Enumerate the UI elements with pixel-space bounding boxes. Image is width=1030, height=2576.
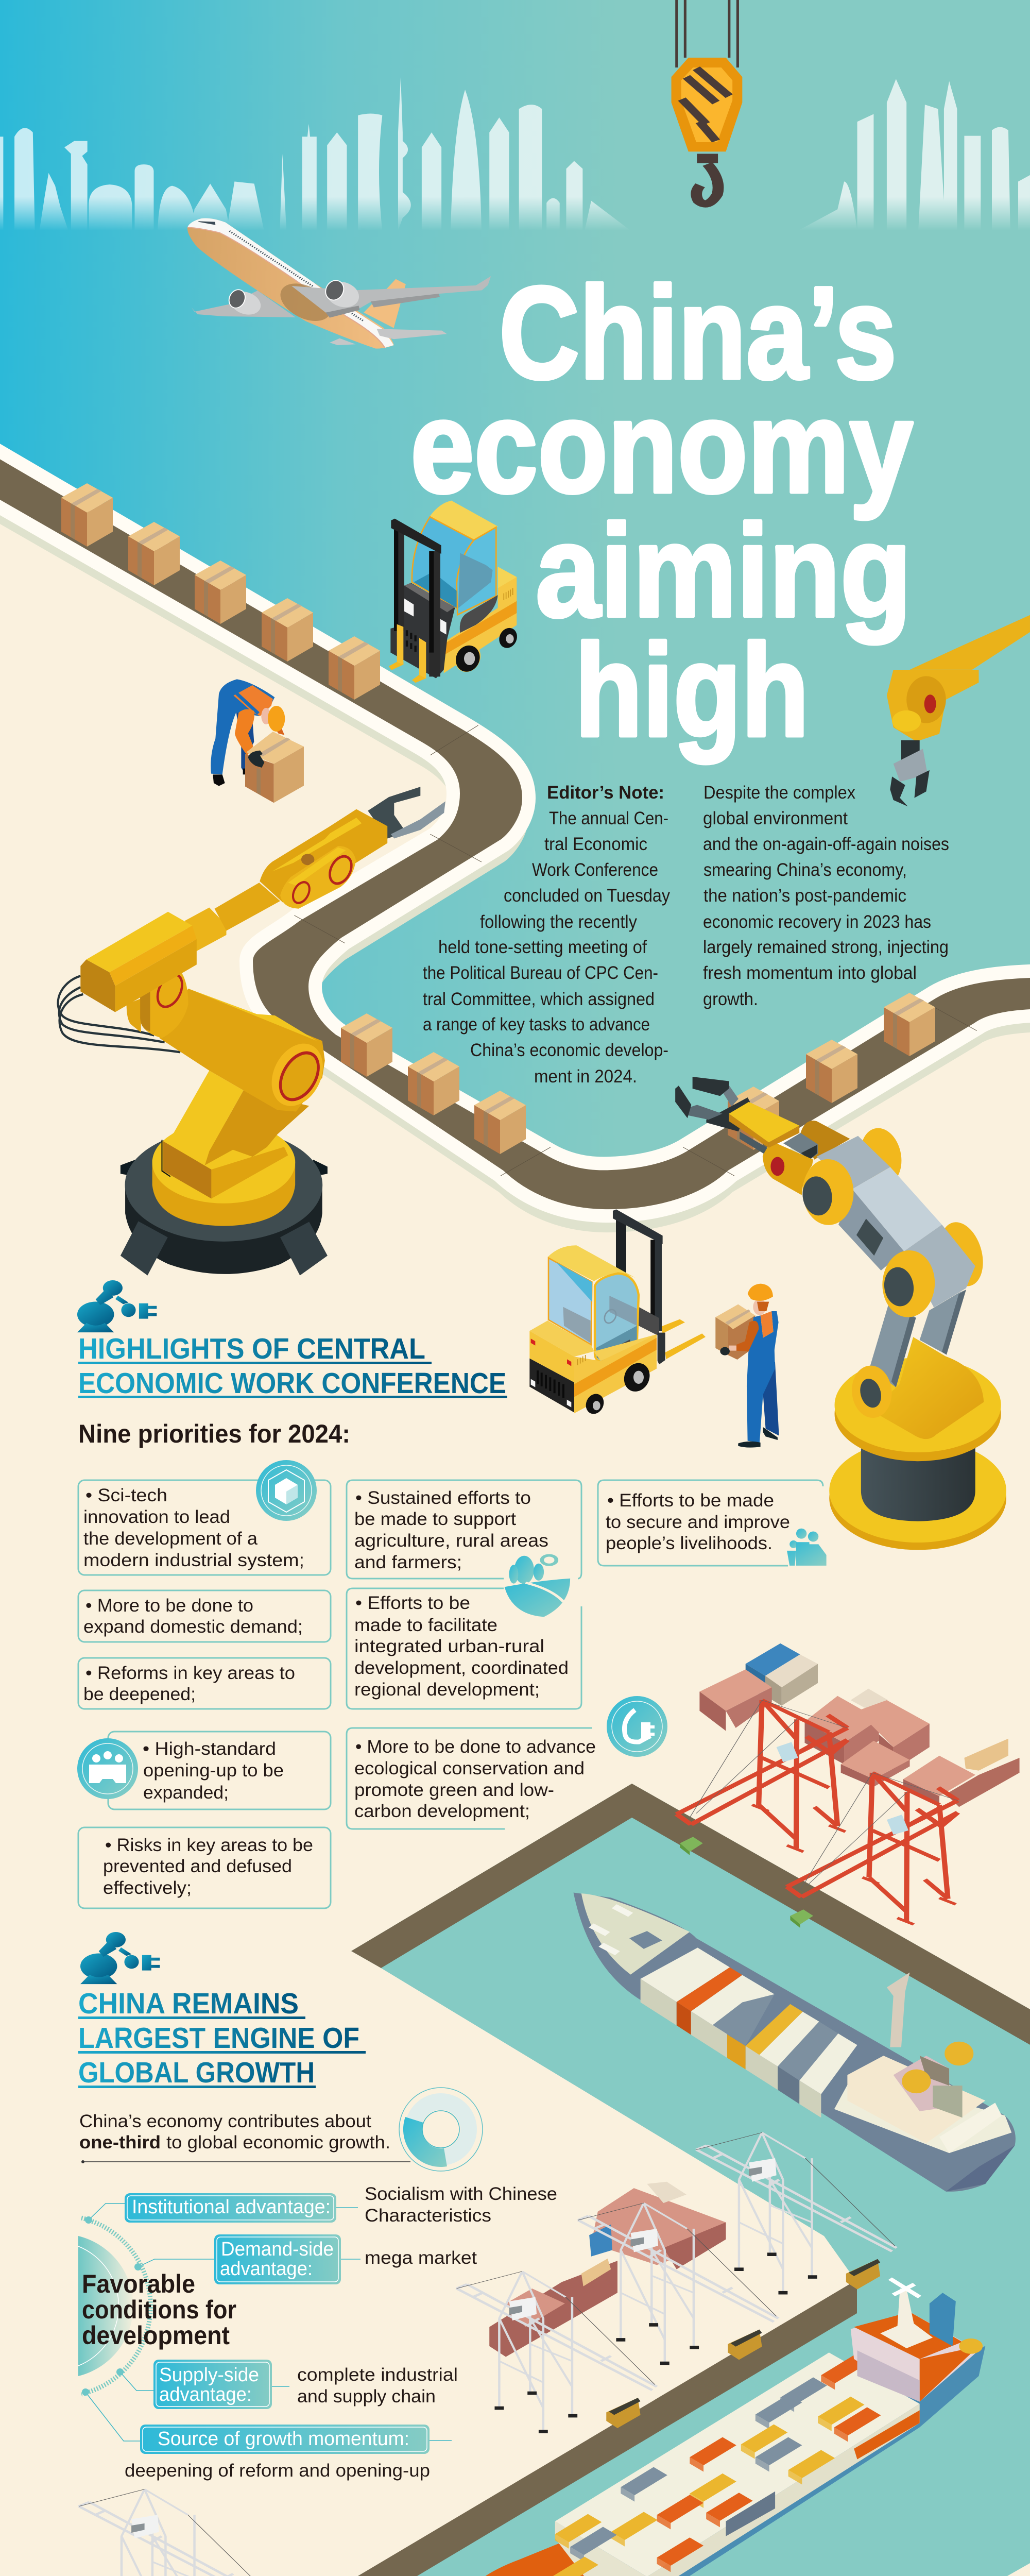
title [410, 260, 913, 764]
text: priorities: to secure and improve [606, 1512, 790, 1532]
editor's note right column: global environment [703, 808, 848, 828]
box: livelihoods [598, 1480, 823, 1566]
text: socialism: Socialism with Chinese [365, 2184, 557, 2204]
text: mega market: mega market [365, 2248, 477, 2268]
tag: supply-side advantage: advantage: [159, 2384, 252, 2405]
text: one third contribution: one-third [79, 2132, 161, 2153]
heading: china remains largest engine [78, 1987, 366, 2089]
heading: china remains largest engine: GLOBAL GROWTH [78, 2056, 315, 2089]
icon: section 1 robot [77, 1280, 157, 1332]
editor's note left column: held tone-setting meeting of [438, 937, 647, 957]
editor's note left column [423, 783, 670, 1087]
diagram: favorable conditions arc [78, 2204, 452, 2441]
icon: innovation cube [256, 1460, 317, 1521]
text: priorities: development, coordinated [354, 1658, 569, 1678]
box: reforms [78, 1658, 331, 1709]
tag: demand-side advantage [214, 2234, 341, 2284]
ship two [460, 2279, 985, 2576]
box: sci-tech [78, 1480, 331, 1575]
text: priorities: • Sustained efforts to [355, 1488, 531, 1508]
tag: demand-side advantage: advantage: [220, 2258, 313, 2280]
editor's note right column: and the on-again-off-again noises [703, 834, 949, 854]
editor's note right column: fresh momentum into global [703, 963, 917, 983]
crane hook [672, 0, 742, 204]
text: priorities: • Efforts to be made [607, 1490, 774, 1511]
heading: china remains largest engine: CHINA REMAINS [78, 1987, 299, 2020]
text: complete industrial: and supply chain [297, 2386, 436, 2406]
editor's note right column: the nation’s post-pandemic [703, 886, 906, 906]
editor's note right column: growth. [703, 989, 758, 1009]
icon: people [787, 1529, 827, 1566]
red cranes [677, 1700, 958, 1928]
box: domestic demand [78, 1590, 331, 1642]
editor's note left column: the Political Bureau of CPC Cen- [423, 963, 658, 983]
tag: demand-side advantage: Demand-side [221, 2239, 334, 2260]
text: priorities: the development of a [83, 1529, 258, 1549]
panel: nine priorities boxes [78, 1480, 823, 1908]
text: priorities [83, 1485, 790, 1898]
heading: favorable conditions: conditions for [82, 2295, 236, 2324]
icon: rural plant and leaf [505, 1555, 570, 1617]
text: priorities: ecological conservation and [354, 1758, 585, 1778]
text: complete industrial [297, 2365, 458, 2406]
text: priorities: expand domestic demand; [83, 1617, 303, 1637]
editor's note right column [703, 783, 949, 1009]
city skyline [0, 77, 1030, 231]
text: priorities: • Efforts to be [355, 1593, 470, 1613]
text: priorities: • Reforms in key areas to [85, 1663, 295, 1683]
text: priorities: be deepened; [83, 1684, 196, 1704]
editor's note left column: concluded on Tuesday [504, 886, 670, 906]
heading: highlights of central economic work conference [78, 1332, 507, 1400]
box: ecological [347, 1728, 592, 1829]
text: priorities: prevented and defused [103, 1856, 292, 1876]
text: priorities: promote green and low- [354, 1780, 554, 1800]
icon: opening-up people [77, 1738, 138, 1799]
editor's note right column: Despite the complex [703, 783, 855, 803]
worker carrying box [211, 679, 304, 803]
forklift bottom [529, 1209, 706, 1417]
tag: source of growth momentum [140, 2425, 430, 2454]
heading: china remains largest engine: LARGEST ENGINE OF [78, 2022, 359, 2055]
text: priorities: modern industrial system; [83, 1550, 304, 1570]
editor's note right column: economic recovery in 2023 has [703, 912, 931, 932]
text: priorities: regional development; [354, 1680, 540, 1700]
heading: highlights of central economic work conference: HIGHLIGHTS OF CENTRAL [78, 1332, 425, 1365]
text: complete industrial: complete industrial [297, 2365, 458, 2385]
icon: section 2 robot [80, 1932, 160, 1984]
tag: supply-side advantage [153, 2360, 272, 2409]
box: opening-up [108, 1732, 331, 1809]
text: priorities: be made to support [354, 1509, 516, 1529]
editor's note left column: ment in 2024. [534, 1066, 637, 1087]
heading: favorable conditions: development [82, 2321, 230, 2350]
title: aiming [536, 498, 912, 645]
box: agriculture [347, 1480, 581, 1579]
text: priorities: and farmers; [354, 1552, 462, 1572]
text: priorities: • More to be done to [85, 1596, 253, 1616]
text: priorities: agriculture, rural areas [354, 1531, 548, 1551]
text: priorities: people’s livelihoods. [606, 1533, 772, 1553]
text: priorities: opening-up to be [143, 1760, 284, 1781]
text: deepening of reform: deepening of reform and opening-up [125, 2461, 430, 2481]
editor's note left column: China’s economic develop- [470, 1040, 668, 1060]
large yellow robot arm [58, 787, 445, 1276]
editor's note right column: largely remained strong, injecting [703, 937, 949, 957]
heading: nine priorities: Nine priorities for 2024: [78, 1419, 350, 1448]
editor's note left column: The annual Cen- [549, 808, 668, 828]
forklift top [389, 501, 520, 683]
right grey robot arm [675, 1077, 1006, 1550]
icon: green plug [607, 1696, 667, 1757]
text: socialism [365, 2184, 557, 2226]
boxes on conveyor [61, 483, 935, 1154]
tag: source of growth momentum: Source of growth momentum: [158, 2428, 409, 2450]
text: priorities: integrated urban-rural [354, 1636, 544, 1656]
text: priorities: expanded; [143, 1783, 229, 1803]
text: priorities: • Sci-tech [85, 1485, 167, 1505]
text: socialism: Characteristics [365, 2206, 491, 2226]
box: risks [78, 1827, 331, 1908]
editor's note left column: tral Economic [544, 834, 647, 854]
editor's note left column: following the recently [480, 912, 637, 932]
text: one third contribution: China’s economy contributes about [79, 2111, 371, 2131]
port containers [699, 1643, 1020, 1807]
editor's note left column: Work Conference [532, 860, 658, 880]
title: economy [410, 374, 913, 520]
tag: institutional advantage: Institutional advantage: [132, 2196, 331, 2218]
text: priorities: made to facilitate [354, 1615, 497, 1635]
text: priorities: carbon development; [354, 1801, 530, 1821]
heading: highlights of central economic work conference: ECONOMIC WORK CONFERENCE [78, 1367, 506, 1400]
editor's note left column: Editor’s Note: [547, 783, 664, 803]
white cranes and red containers [0, 2132, 897, 2576]
top right robot arm [887, 615, 1030, 806]
heading: favorable conditions [82, 2269, 236, 2350]
text: priorities: • Risks in key areas to be [105, 1835, 313, 1855]
box: integrated development [347, 1588, 581, 1709]
title: China’s [499, 260, 897, 406]
tag: supply-side advantage: Supply-side [159, 2364, 259, 2386]
text: one third contribution: to global economic growth. [166, 2132, 390, 2153]
text: priorities: innovation to lead [83, 1507, 230, 1527]
editor's note left column: a range of key tasks to advance [423, 1014, 650, 1035]
conveyor belt [0, 439, 1030, 1232]
ship one [574, 1892, 1016, 2192]
text: priorities: effectively; [103, 1878, 192, 1898]
worker with box [715, 1284, 779, 1448]
plane [187, 218, 491, 349]
editor's note left column: tral Committee, which assigned [423, 989, 655, 1009]
heading: favorable conditions: Favorable [82, 2269, 195, 2298]
chart: one third donut [399, 2088, 483, 2171]
text: one third contribution [79, 2111, 410, 2163]
text: priorities: • More to be done to advance [355, 1737, 596, 1757]
editor's note right column: smearing China’s economy, [703, 860, 907, 880]
text: priorities: • High-standard [143, 1739, 276, 1759]
title: high [575, 617, 809, 764]
